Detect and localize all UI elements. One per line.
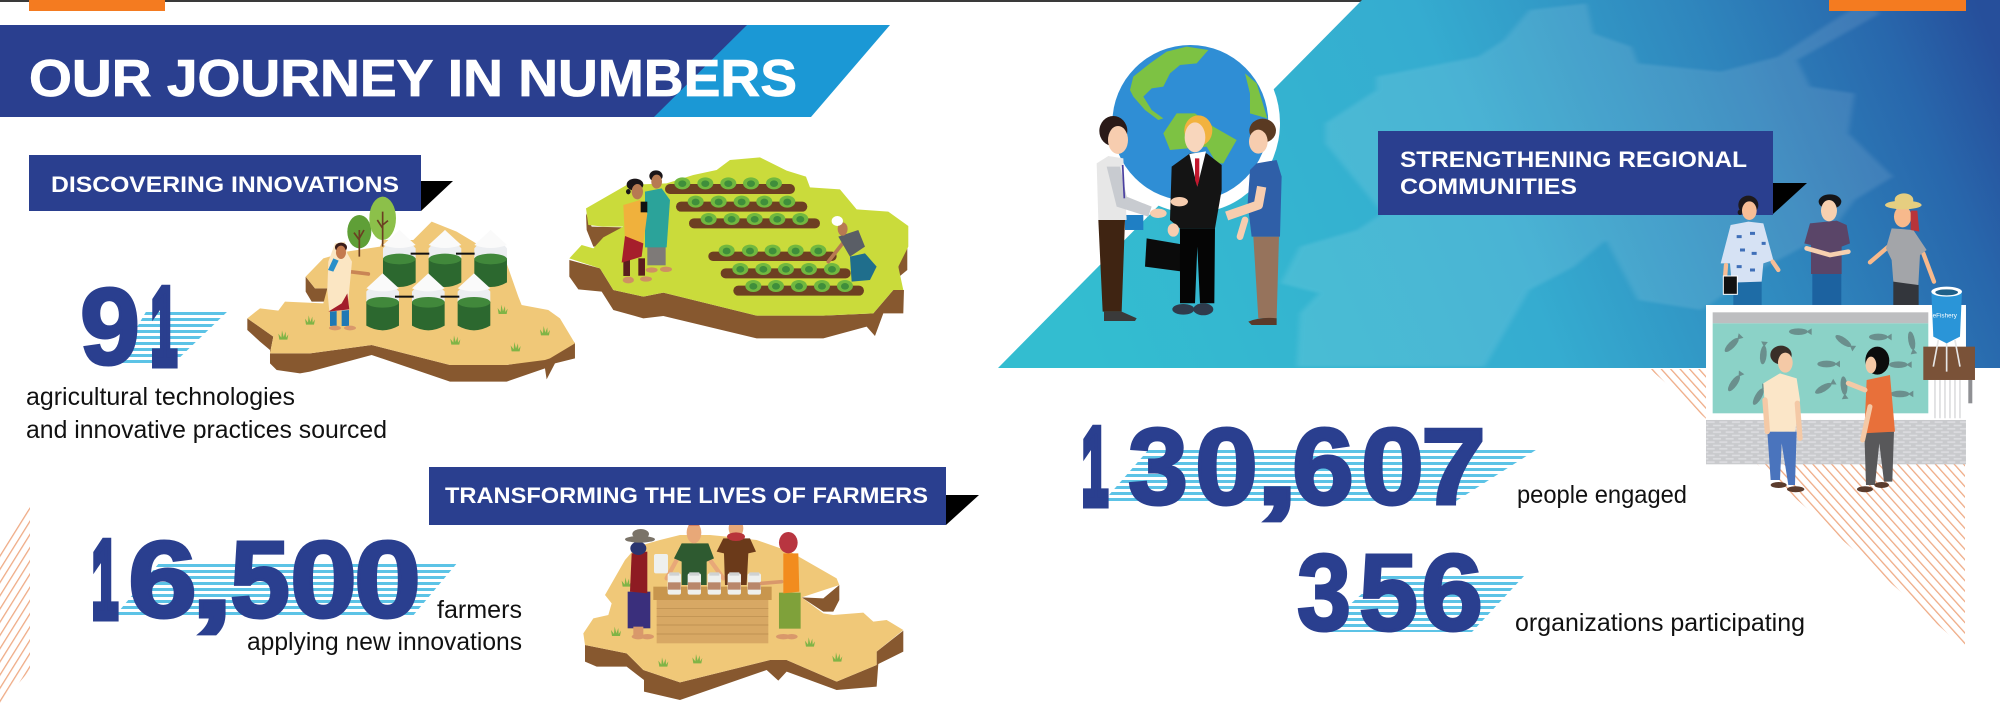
section tag: transforming lives: TRANSFORMING THE LIVES OF FARMERS [445,483,928,508]
illustration: globe and handshake [1097,45,1282,325]
man in black suit [1145,115,1222,315]
woman in batik shirt [1721,196,1778,306]
stat: 16,500: 0 [290,519,357,641]
stat: 16,500: 0 [354,519,421,641]
visitor in cream shirt [1763,346,1804,492]
illustration: sand map with algae tanks [247,197,575,382]
globe [1112,45,1268,201]
stat: 16,500: applying new innovations [247,628,522,656]
cabbage beds [665,177,864,296]
stat: 130,607: , [1255,406,1299,528]
stat: 91: 9 [80,266,140,388]
caption: people engaged [1517,481,1687,509]
trees [347,197,396,257]
stat: 356 [1297,532,1805,654]
section tag: strengthening communities: COMMUNITIES [1400,174,1577,199]
stat: 130,607: 7 [1421,406,1486,528]
two women [622,170,672,283]
map land shape [1281,3,1893,367]
stripes [1102,448,1539,503]
man in white shirt [1097,116,1167,321]
kneeling farmer [828,216,877,282]
title: OUR JOURNEY IN NUMBERS [29,50,797,108]
stat: 130,607: 0 [1361,406,1424,528]
stripes [115,310,229,365]
stat: 91: and innovative practices sourced [26,416,387,444]
tank frame [1706,305,1966,420]
caption: organizations participating [1515,609,1805,637]
fish [1723,328,1917,406]
stat: 356: 3 [1297,532,1351,654]
woman in sari [327,242,368,330]
stat: 130,607: 3 [1128,406,1188,528]
stat: 356: 6 [1421,532,1483,654]
woman with grey hat [625,529,668,639]
stat: 130,607 [1082,406,1687,528]
orange tab right [1829,0,1966,11]
section tag: strengthening communities: STRENGTHENING REGIONAL [1400,147,1747,172]
stat: 130,607: 1 [1082,406,1108,528]
illustration: farmers at jar table [583,511,903,700]
title banner [0,25,890,117]
section tag: discovering innovations [29,155,453,211]
stat: 356: 5 [1359,532,1418,654]
section tag: transforming lives [429,467,979,525]
panel: regional communities background [998,0,2000,368]
caption: agricultural technologies [26,383,295,411]
farmer in brown shirt [717,511,756,585]
hatch left [0,507,30,705]
stat: 130,607: 6 [1292,406,1354,528]
section tag: strengthening communities [1378,131,1807,215]
top rule [0,0,2000,2]
stat: 16,500: 5 [230,519,290,641]
feeder bucket and stand: eFishery [1933,312,1958,319]
visitor in orange shirt [1848,347,1895,492]
brick wall [1706,420,1966,464]
man in plaid shirt [1804,194,1850,306]
stripes [1319,575,1525,632]
tanks [366,230,507,330]
feeder bucket and stand [1923,287,1975,403]
orange tab left [29,0,165,11]
stat: 130,607: 0 [1195,406,1258,528]
section tag: discovering innovations: DISCOVERING INNOVATIONS [51,172,399,197]
stat: 16,500: 6 [128,519,197,641]
man in blue shirt [1227,119,1282,325]
caption: farmers [437,596,522,624]
illustration: green map with cabbage farmers [569,157,908,338]
stripes [114,562,458,617]
stat: 16,500 [92,519,522,656]
stat: 16,500: 1 [92,519,118,641]
woman with orange top [762,532,801,639]
white halo behind globe [1106,33,1280,213]
stat: 16,500: , [190,519,234,641]
farmer in green shirt [667,519,723,585]
man with straw hat [1870,193,1934,306]
table with jars [653,572,772,643]
stat: 91 [26,266,387,444]
hatch right [1650,369,1965,649]
stat: 91: 1 [151,266,177,388]
illustration: community at fish tank [1706,193,1975,492]
